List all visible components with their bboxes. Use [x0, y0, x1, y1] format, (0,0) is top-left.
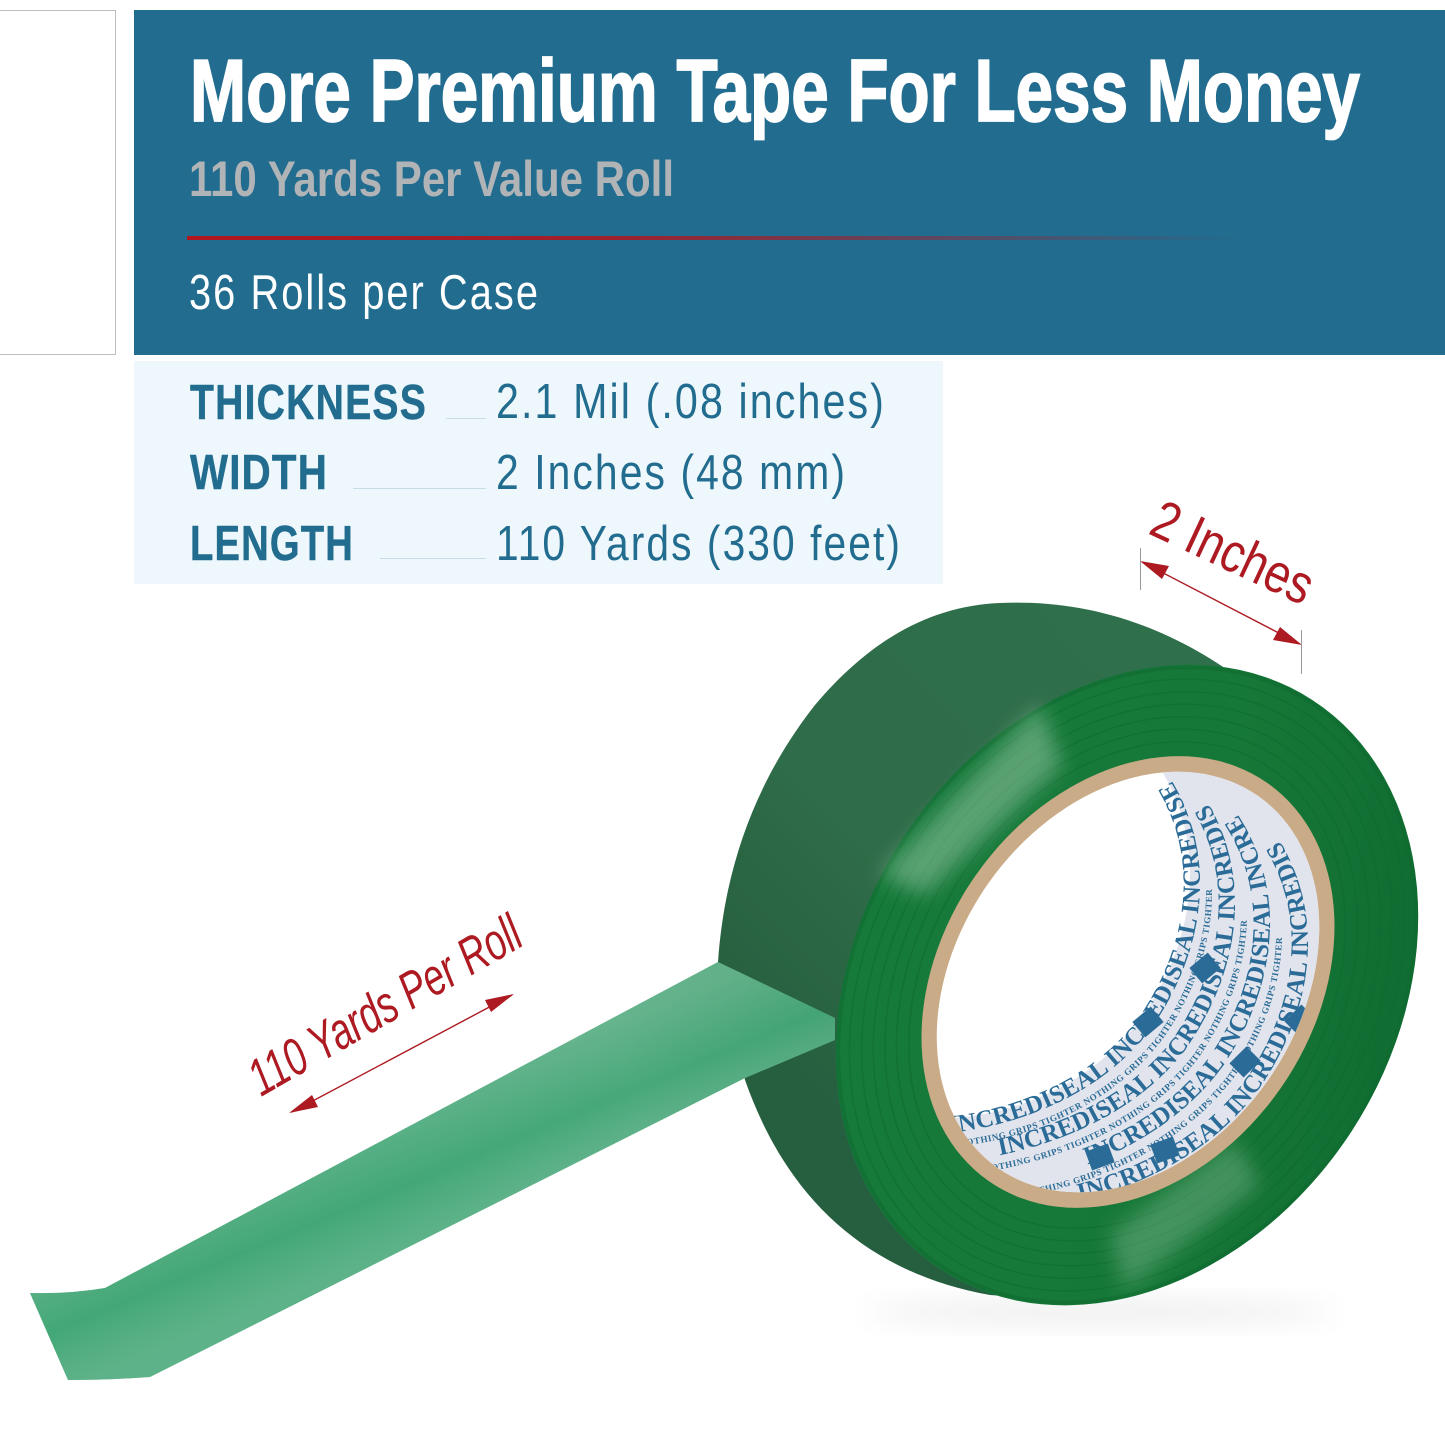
length value: 110 Yards (330 feet) — [496, 517, 902, 571]
2 inches label: 2 Inches — [1142, 488, 1324, 617]
core inner liner with printed logos: INCREDISEAL INCREDISEAL INCREDISEAL — [1076, 843, 1308, 1192]
loose tape strip — [30, 962, 835, 1380]
empty outlined box — [0, 10, 116, 354]
width dimension callout — [1140, 488, 1324, 674]
roll front face — [717, 554, 1445, 1416]
core inner liner with printed logos — [954, 772, 1320, 1192]
cardboard core — [836, 676, 1420, 1288]
width label: WIDTH — [190, 446, 328, 500]
rolls per case: 36 Rolls per Case — [189, 266, 540, 320]
core inner liner with printed logos: INCREDISEAL INCREDISEAL INCREDISEAL — [954, 782, 1200, 1132]
header panel — [134, 10, 1445, 355]
core inner liner with printed logos: INCREDISEAL INCREDISEAL INCREDISEAL — [997, 806, 1235, 1156]
length dimension callout — [238, 904, 533, 1113]
thickness value: 2.1 Mil (.08 inches) — [496, 375, 886, 429]
width value: 2 Inches (48 mm) — [496, 446, 847, 500]
110 yards per roll label: 110 Yards Per Roll — [238, 904, 533, 1107]
thickness label: THICKNESS — [190, 376, 427, 430]
tape roll photo illustration — [30, 561, 1418, 1380]
specifications panel — [134, 361, 943, 584]
subtitle: 110 Yards Per Value Roll — [189, 151, 674, 207]
core inner liner with printed logos: INCREDISEAL INCREDISEAL INCREDISEAL — [1082, 816, 1270, 1164]
length label: LENGTH — [190, 517, 354, 571]
core inner liner with printed logos: NOTHING GRIPS TIGHTER NOTHING GRIPS TIGHTER NOTHING GRIPS TIGHTER — [993, 920, 1247, 1170]
core inner liner with printed logos: NOTHING GRIPS TIGHTER NOTHING GRIPS TIGHTER NOTHING GRIPS TIGHTER — [968, 889, 1212, 1144]
roll body — [718, 603, 1235, 1300]
core inner liner with printed logos: NOTHING GRIPS TIGHTER NOTHING GRIPS TIGHTER NOTHING GRIPS TIGHTER — [1039, 938, 1282, 1190]
